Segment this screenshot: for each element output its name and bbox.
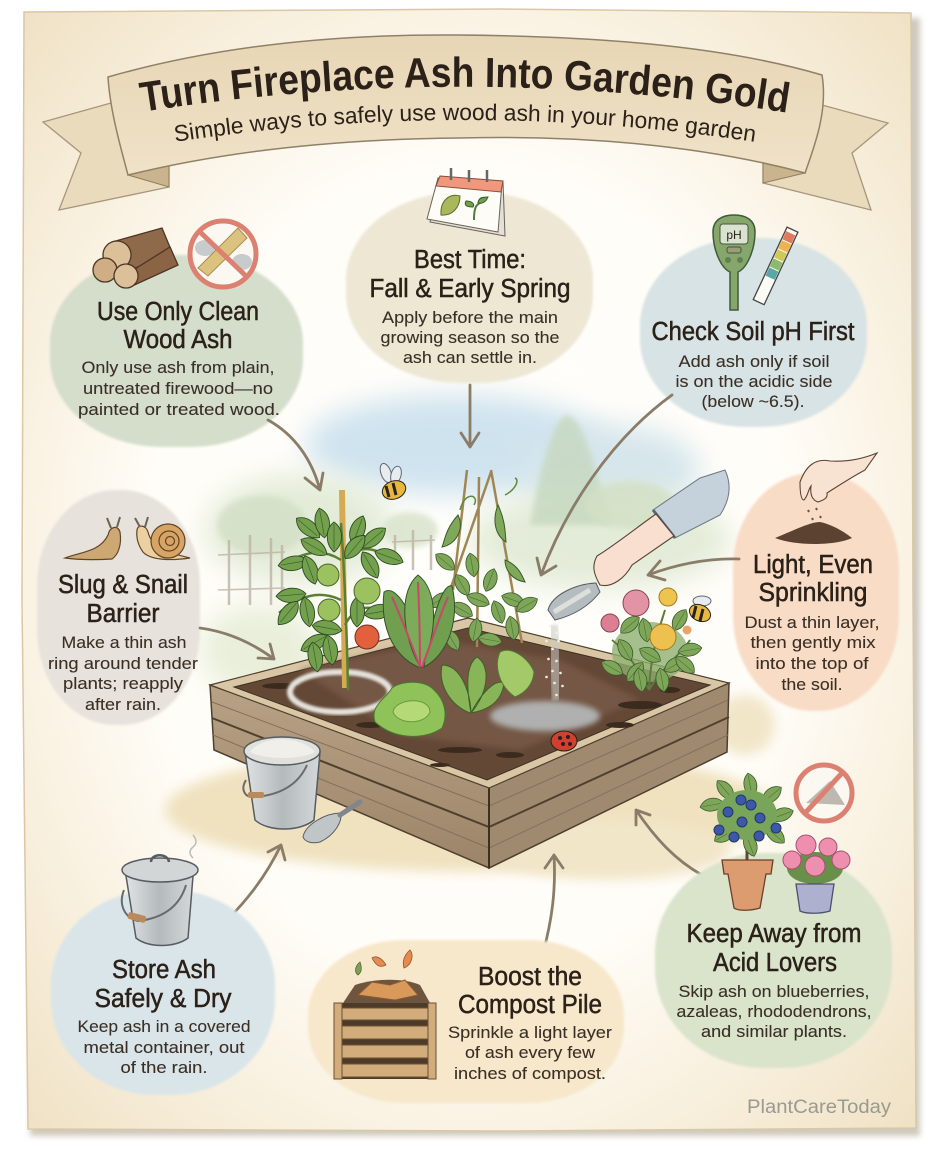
arrow: best time to bed: [461, 385, 479, 447]
tomato plant: [273, 490, 406, 690]
body text: Dust a thin layer,: [744, 613, 880, 632]
icon: soil mound: [775, 508, 852, 544]
ash ring and patch: [290, 672, 600, 731]
arrow: acid lovers to bed: [636, 810, 702, 875]
icon: hand pinching: [800, 453, 877, 502]
icon: pH meter: pH: [726, 228, 742, 242]
hand with scoop sprinkling ash: [546, 470, 729, 700]
heading: Store Ash: [112, 956, 216, 984]
pea trellis: [427, 470, 540, 653]
body text: growing season so the: [380, 328, 560, 347]
body text: and similar plants.: [701, 1022, 847, 1041]
icon: logs: [93, 228, 178, 288]
body text: [744, 613, 880, 694]
body text: [380, 308, 560, 367]
body text: then gently mix: [750, 633, 876, 652]
bees and ladybug: [378, 462, 713, 751]
body text: painted or treated wood.: [78, 400, 280, 419]
heading: Best Time:: [414, 246, 526, 274]
body text: [676, 352, 832, 411]
title: Turn Fireplace Ash Into Garden Gold: [138, 56, 790, 112]
body text: [676, 982, 872, 1041]
icon: slug and snail: [65, 517, 190, 560]
body text: Apply before the main: [382, 308, 558, 327]
arrow: store ash to bucket: [229, 845, 285, 918]
heading: Safely & Dry: [94, 985, 232, 1013]
heading: Wood Ash: [124, 326, 232, 354]
body text: after rain.: [85, 695, 161, 714]
ash bucket and scoop: [243, 737, 360, 843]
heading: [58, 571, 188, 628]
watermark: PlantCareToday: [747, 1097, 892, 1118]
icon: metal ash can: [122, 835, 198, 946]
ribbon tails: [43, 103, 169, 210]
icon: blueberry pot: [699, 772, 795, 910]
heading: Use Only Clean: [97, 298, 259, 326]
heading: Fall & Early Spring: [370, 275, 570, 303]
heading: [370, 246, 570, 303]
bed rim: [210, 618, 729, 788]
lettuce and seedlings: [374, 650, 534, 736]
heading: Barrier: [86, 600, 160, 628]
arrow: pH to bed: [537, 395, 672, 575]
body text: of ash every few: [465, 1043, 596, 1062]
heading: [97, 298, 259, 354]
icon: compost bin: [334, 950, 436, 1079]
icon: no ash sign: [795, 764, 853, 822]
raised garden bed: [210, 618, 729, 868]
arrow: clean ash to bed: [268, 420, 323, 490]
panel: best time: [346, 168, 593, 383]
panel: soil pH: [640, 215, 867, 427]
title banner: [42, 34, 890, 211]
icon: calendar: [427, 168, 505, 236]
body text: inches of compost.: [454, 1064, 606, 1083]
body text: [48, 633, 198, 714]
arrow: slug barrier to bed: [200, 628, 274, 659]
heading: [753, 551, 873, 607]
body text: Keep ash in a covered: [78, 1017, 251, 1036]
body text: plants; reapply: [63, 674, 184, 693]
chard plant: [383, 575, 454, 667]
arrows: [200, 385, 739, 953]
heading: Check Soil pH First: [652, 318, 854, 346]
heading: [458, 963, 602, 1019]
body text: ash can settle in.: [403, 348, 537, 367]
arrow: sprinkling to hand: [648, 559, 739, 580]
body text: Only use ash from plain,: [82, 358, 274, 377]
body text: metal container, out: [84, 1038, 245, 1057]
icon: pH test strip: [753, 227, 798, 305]
heading: Keep Away from: [686, 920, 862, 948]
body text: into the top of: [756, 654, 869, 673]
body text: azaleas, rhododendrons,: [676, 1002, 872, 1021]
panel: light sprinkling: [733, 453, 899, 711]
body text: Skip ash on blueberries,: [678, 982, 870, 1001]
ribbon main: [108, 35, 824, 175]
body text: untreated firewood—no: [83, 379, 273, 398]
body text: [78, 358, 280, 419]
icon: no painted wood: [189, 220, 257, 288]
body text: Add ash only if soil: [678, 352, 830, 371]
panel: acid lovers: [655, 764, 892, 1068]
body text: ring around tender: [48, 654, 198, 673]
bed walls: [210, 685, 489, 868]
subtitle: Simple ways to safely use wood ash in your home garden: [175, 104, 755, 142]
body text: [78, 1017, 251, 1077]
arrow: compost to bed: [543, 855, 563, 953]
panel: clean wood ash: [50, 220, 303, 447]
body text: Make a thin ash: [62, 633, 186, 652]
heading: Sprinkling: [758, 579, 868, 607]
body text: of the rain.: [120, 1058, 208, 1077]
body text: is on the acidic side: [676, 372, 832, 391]
heading: [686, 920, 862, 977]
body text: Sprinkle a light layer: [448, 1023, 612, 1042]
heading: Slug & Snail: [58, 571, 188, 599]
body text: [448, 1023, 612, 1083]
soil: [234, 628, 710, 780]
body text: (below ~6.5).: [702, 392, 804, 411]
heading: Acid Lovers: [713, 949, 837, 977]
heading: [94, 956, 232, 1013]
heading: Compost Pile: [458, 991, 602, 1019]
body text: the soil.: [782, 675, 842, 694]
panel: store ash: [51, 835, 275, 1095]
icon: pH meter: [713, 215, 755, 310]
panel: slug and snail barrier: [37, 490, 200, 725]
heading: Boost the: [478, 963, 582, 991]
background sky and scenery wash: [165, 395, 775, 880]
heading: Light, Even: [753, 551, 873, 579]
rose bush: [599, 588, 703, 701]
icon: azalea pot: [783, 835, 850, 913]
panel: compost: [308, 940, 624, 1103]
